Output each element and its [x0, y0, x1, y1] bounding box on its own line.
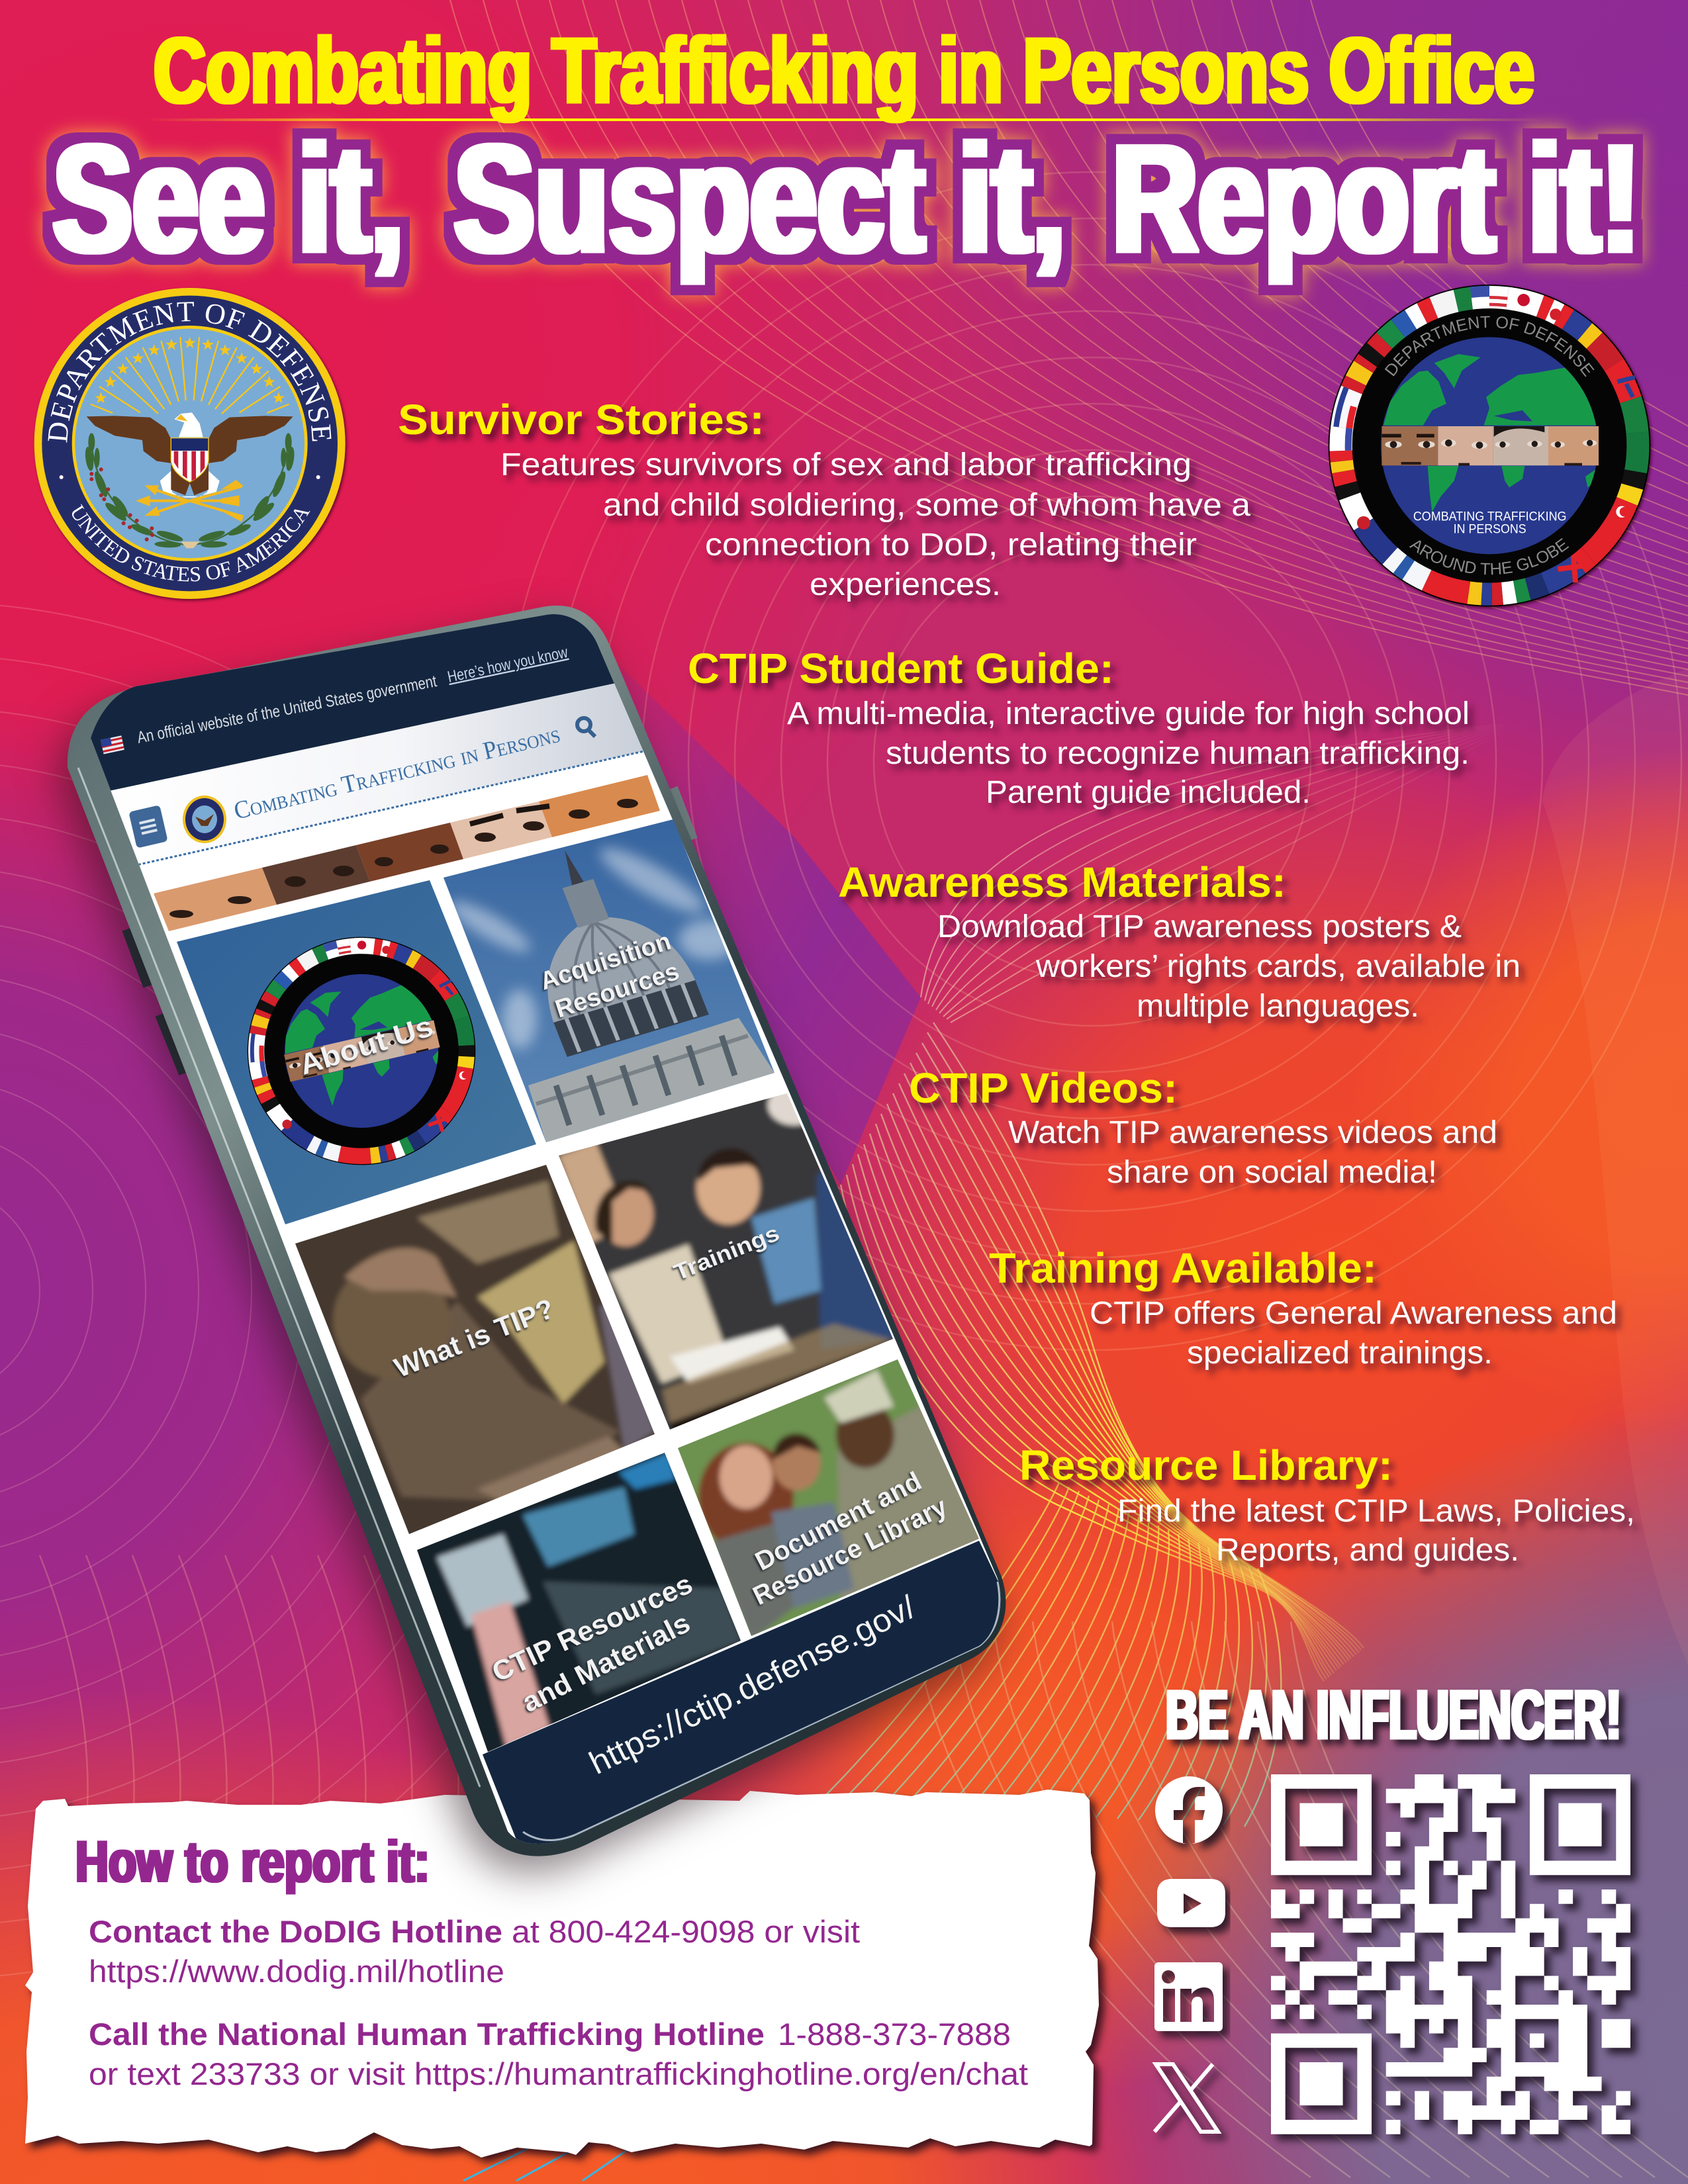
headline: See it, Suspect it, Report it!: Suspect it, [454, 113, 1066, 285]
panel: how to report it, torn paper [25, 1790, 1099, 2158]
eyes strip [154, 775, 660, 931]
CTIP Videos: Watch TIP awareness videos and [1008, 1115, 1497, 1150]
header band [103, 682, 650, 866]
gov banner [91, 614, 614, 790]
tile: document and resource library [669, 1350, 986, 1648]
Awareness Materials: workers’ rights cards, available in [1035, 949, 1521, 984]
tile label: CTIP Resources [487, 1568, 697, 1688]
banner flag icon [101, 735, 124, 754]
CTIP Student Guide: Parent guide included. [986, 775, 1311, 810]
Training Available: specialized trainings. [1187, 1336, 1493, 1371]
phone mockup [66, 563, 1033, 1873]
tile label [537, 927, 682, 1024]
tile: about us [177, 880, 536, 1224]
tile label: Acquisition [537, 927, 675, 996]
Resource Library [1019, 1441, 1635, 1568]
national human trafficking hotline: 1-888-373-7888 [778, 2017, 1011, 2052]
tile label: and Materials [517, 1607, 695, 1718]
title rule [146, 118, 1544, 121]
header seal icon [183, 796, 226, 843]
Resource Library: Resource Library: [1019, 1441, 1393, 1489]
contact DoDIG hotline: at 800-424-9098 or visit [512, 1914, 860, 1949]
ribbon: lower fan [821, 1482, 1281, 1827]
CTIP Student Guide: CTIP Student Guide: [688, 645, 1114, 692]
heading: how to report it: How to report it: [75, 1829, 430, 1894]
Resource Library: Find the latest CTIP Laws, Policies, [1117, 1494, 1635, 1529]
seal rays [91, 337, 289, 414]
tile label: What is TIP? [390, 1293, 558, 1383]
seal stars [95, 337, 285, 403]
tile: what is TIP [285, 1152, 669, 1549]
CTIP Videos: share on social media! [1107, 1155, 1437, 1190]
icon: X [1154, 2064, 1218, 2132]
badge centre text: COMBATING TRAFFICKING [1413, 510, 1566, 524]
CTIP Videos: CTIP Videos: [909, 1064, 1178, 1112]
icon: linkedin [1154, 1962, 1223, 2031]
CTIP Student Guide: A multi-media, interactive guide for high school [787, 696, 1470, 731]
Survivor Stories: connection to DoD, relating their [705, 527, 1197, 563]
phone URL: https://ctip.defense.gov/ [584, 1589, 921, 1782]
icon: youtube [1157, 1879, 1225, 1927]
tile badge [224, 914, 498, 1188]
social icons [1154, 1776, 1225, 2132]
badge lettering top: DEPARTMENT OF DEFENSE [1382, 313, 1597, 380]
Survivor Stories: experiences. [810, 567, 1001, 602]
Awareness Materials [838, 858, 1521, 1024]
seal berries [89, 467, 154, 541]
phone side buttons [127, 929, 184, 1073]
seal wreath [84, 433, 295, 548]
tile: trainings [549, 1085, 900, 1443]
seal lettering top: DEPARTMENT OF DEFENSE [48, 302, 331, 443]
phone screen [91, 614, 1001, 1844]
Survivor Stories: Survivor Stories: [398, 396, 765, 443]
tile: acquisition resources [424, 807, 794, 1158]
Training Available: Training Available: [989, 1244, 1377, 1292]
Survivor Stories: Features survivors of sex and labor trafficking [500, 447, 1192, 482]
bottom URL band [483, 1541, 1033, 1873]
ribbon: main wave sheet [841, 1023, 1364, 1681]
CTIP Student Guide [688, 645, 1470, 810]
Awareness Materials: Awareness Materials: [838, 858, 1286, 906]
CTIP Student Guide: students to recognize human trafficking. [886, 736, 1470, 771]
banner text: An official website of the United States government [136, 672, 438, 747]
national human trafficking hotline [89, 2017, 1028, 2091]
phone body [68, 606, 1006, 1856]
tile label: Resource Library [749, 1492, 952, 1611]
QR code [1271, 1782, 1630, 2127]
headline: See it, Suspect it, Report it!: See it, [53, 113, 404, 285]
contact DoDIG hotline [89, 1914, 860, 1989]
banner link: Here’s how you know [446, 643, 570, 686]
seal eagle [87, 412, 293, 498]
Survivor Stories: and child soldiering, some of whom have a [603, 488, 1250, 523]
header search icon [577, 718, 595, 737]
national human trafficking hotline: or text 233733 or visit https://humantraffickinghotline.org/en/chat [89, 2056, 1028, 2091]
seal lettering bottom: UNITED STATES OF AMERICA [71, 504, 310, 581]
icon: Department of Defense seal [34, 288, 346, 599]
CTIP Videos [909, 1064, 1497, 1190]
Survivor Stories [398, 396, 1250, 602]
badge centre text [1413, 510, 1566, 537]
Training Available: CTIP offers General Awareness and [1090, 1296, 1617, 1331]
Resource Library: Reports, and guides. [1216, 1533, 1519, 1568]
Awareness Materials: multiple languages. [1137, 989, 1419, 1024]
Training Available [989, 1244, 1617, 1371]
tile label: Trainings [671, 1220, 783, 1285]
tile: CTIP resources and materials [410, 1449, 748, 1760]
national human trafficking hotline: Call the National Human Trafficking Hotline [89, 2017, 765, 2052]
seal arrows [136, 480, 244, 522]
badge lettering bottom: AROUND THE GLOBE [1407, 535, 1572, 579]
tile label: Document and [751, 1467, 926, 1576]
header site title: Combating Trafficking in Persons [231, 720, 563, 825]
badge centre text: IN PERSONS [1454, 523, 1526, 537]
phone power button [674, 788, 694, 839]
headline: See it, Suspect it, Report it! [53, 113, 1640, 285]
ribbon: upper fold sheet [921, 721, 1523, 1023]
contact DoDIG hotline: https://www.dodig.mil/hotline [89, 1954, 504, 1989]
text block: feature list [398, 396, 1635, 1568]
icon: CTIP around the globe badge [1329, 285, 1650, 607]
tile label: Resources [552, 958, 682, 1024]
header menu button [128, 805, 168, 848]
icon: facebook [1155, 1776, 1223, 1844]
contact DoDIG hotline: Contact the DoDIG Hotline [89, 1914, 502, 1949]
Awareness Materials: Download TIP awareness posters & [937, 909, 1462, 944]
torn paper sheet [25, 1790, 1099, 2158]
tile label: About Us [296, 1010, 437, 1081]
